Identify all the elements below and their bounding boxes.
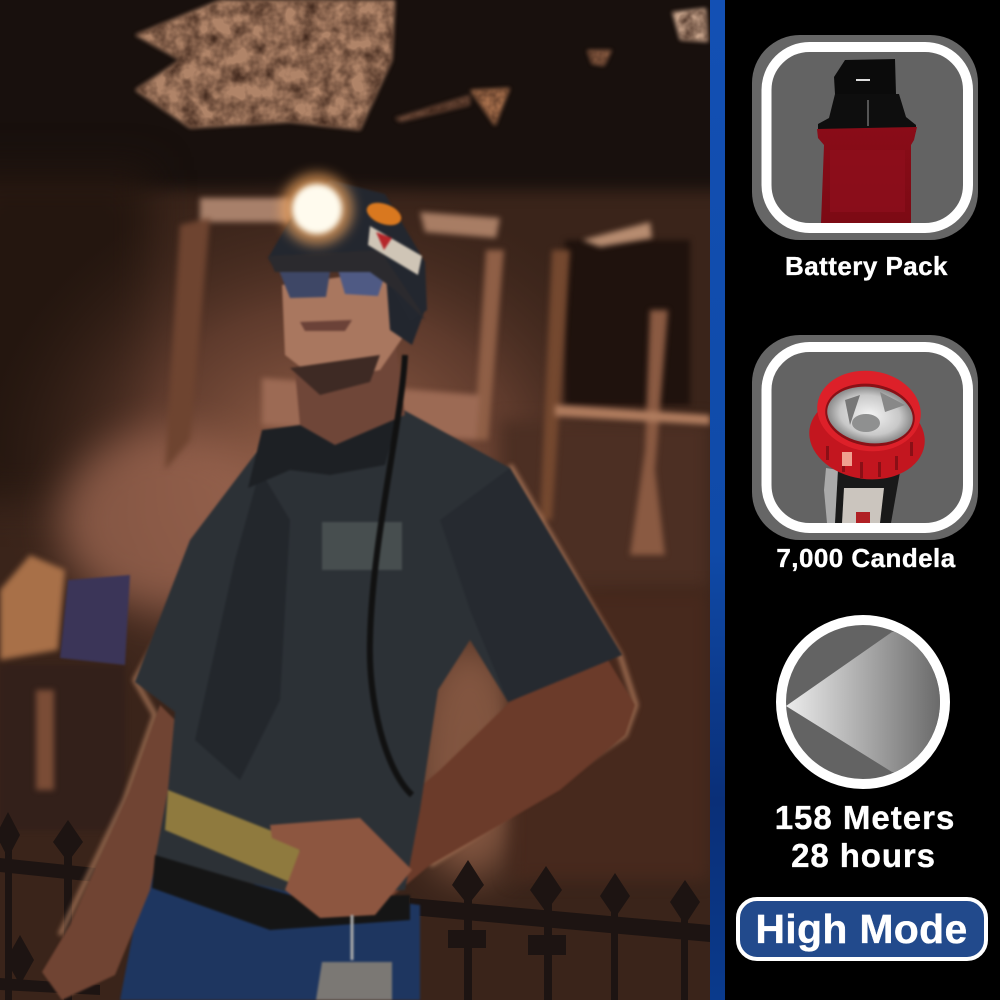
mine background lighting [0, 0, 750, 880]
jeans [120, 870, 420, 1000]
iron fence [0, 812, 710, 1000]
headlamp glow [281, 173, 353, 245]
side of head and hair [385, 284, 424, 346]
polo shirt [134, 410, 510, 892]
cable [370, 355, 412, 795]
panel: battery pack [752, 35, 978, 281]
label: 158 Meters: 158 Meters [775, 799, 955, 836]
icon: light beam circle [781, 620, 945, 784]
badge: High Mode: High Mode [755, 906, 968, 952]
panel frame [752, 35, 978, 240]
hanging lamp at belt [350, 915, 354, 960]
panel: beam distance [775, 620, 955, 874]
hard hat [268, 180, 427, 322]
miner figure [42, 180, 636, 1000]
label: 28 hours: 28 hours [791, 837, 936, 874]
neck [295, 376, 406, 446]
panel: candela [752, 335, 978, 573]
label: 7,000 Candela: 7,000 Candela [776, 543, 956, 573]
collar [248, 420, 394, 487]
shirt logo [322, 522, 402, 570]
photo: miner in a mine tunnel [0, 0, 750, 1000]
cave ceiling rocks [135, 0, 708, 130]
mine timber frames and light gaps [0, 198, 710, 790]
poster on the wall [60, 575, 130, 665]
hat stickers [368, 226, 422, 275]
glasses [278, 268, 330, 298]
rim light around figure [60, 450, 636, 935]
label: Battery Pack: Battery Pack [785, 251, 948, 281]
blue divider bar [710, 0, 725, 1000]
hand on hip [270, 818, 412, 918]
face [280, 276, 403, 372]
right forearm [391, 660, 635, 896]
belt [165, 790, 300, 886]
badge: High Mode [738, 899, 986, 959]
left arm [42, 705, 175, 1000]
icon: battery pack [817, 59, 917, 223]
panel frame [752, 335, 978, 540]
icon: headlamp [809, 370, 925, 523]
